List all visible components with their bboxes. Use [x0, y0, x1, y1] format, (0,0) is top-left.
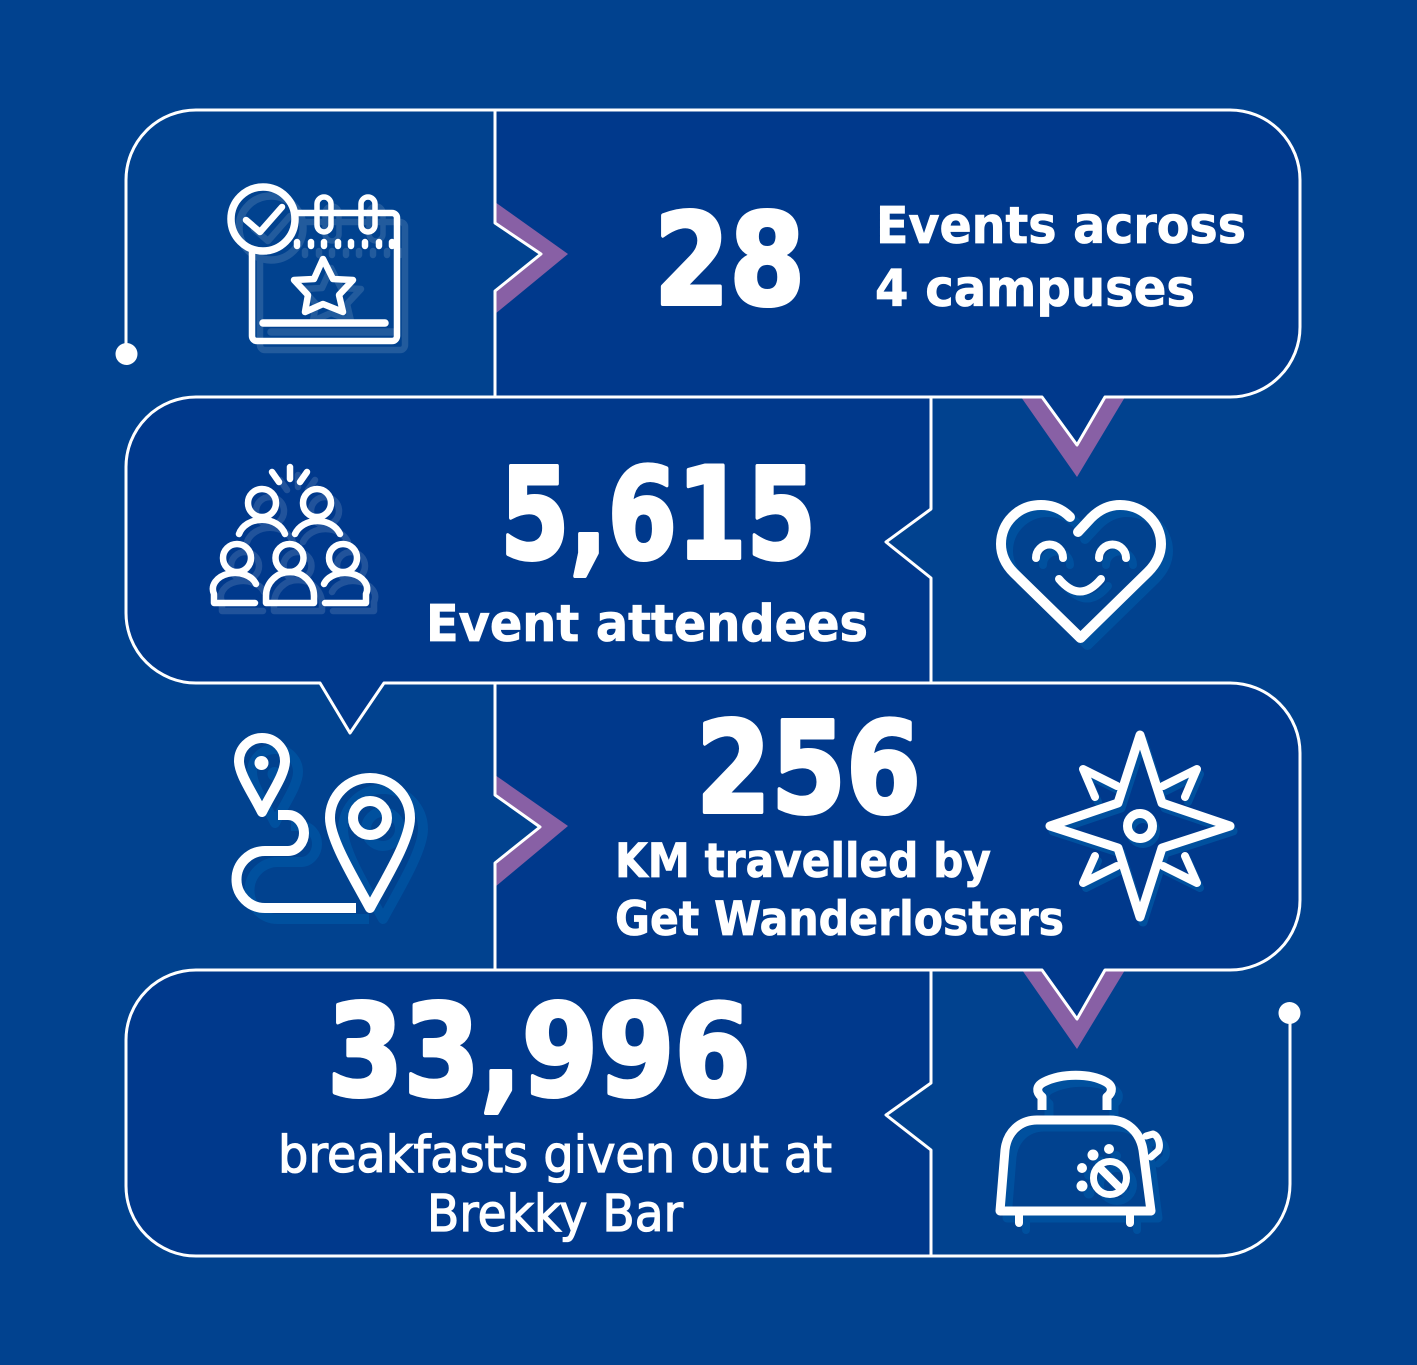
icon: compass star [1050, 735, 1233, 922]
panel: breakfasts background [126, 970, 931, 1256]
text: breakfasts given out at brekky bar: Brekky Bar [427, 1185, 683, 1244]
stat: 256: 256 [696, 694, 921, 842]
text: breakfasts given out at brekky bar: breakfasts given out at [278, 1126, 832, 1185]
panel: attendees background [126, 397, 931, 733]
text: event attendees: Event attendees [426, 595, 868, 654]
text: km travelled by get wanderlosters: Get Wanderlosters [615, 892, 1064, 947]
text: km travelled by get wanderlosters: KM travelled by [615, 834, 991, 889]
connector line running through all panels [126, 110, 1300, 1256]
text: km travelled by get wanderlosters [615, 834, 1064, 947]
stat: 28: 28 [654, 186, 805, 334]
line start dot [116, 343, 138, 365]
icon: group of people [213, 467, 375, 611]
icon: map route with pins [236, 738, 423, 919]
text: events across 4 campuses [875, 197, 1246, 319]
icon: toaster [1000, 1075, 1166, 1230]
line end dot [1278, 1002, 1300, 1024]
chevron: first panel pointer [495, 202, 568, 314]
icon: smiling heart [1001, 505, 1168, 645]
text: events across 4 campuses: 4 campuses [875, 260, 1195, 319]
stat: 5,615: 5,615 [500, 440, 816, 588]
chevron: breakfasts pointer [1022, 970, 1125, 1049]
text: breakfasts given out at brekky bar [278, 1126, 832, 1244]
panel: kilometres background [495, 683, 1300, 1019]
icon: calendar with star and check [231, 187, 405, 350]
stat: 33,996: 33,996 [327, 977, 751, 1125]
panel: 28 events background [495, 110, 1300, 445]
chevron: attendees pointer [1021, 397, 1125, 477]
chevron: kilometres pointer [495, 775, 568, 887]
text: events across 4 campuses: Events across [876, 197, 1246, 256]
